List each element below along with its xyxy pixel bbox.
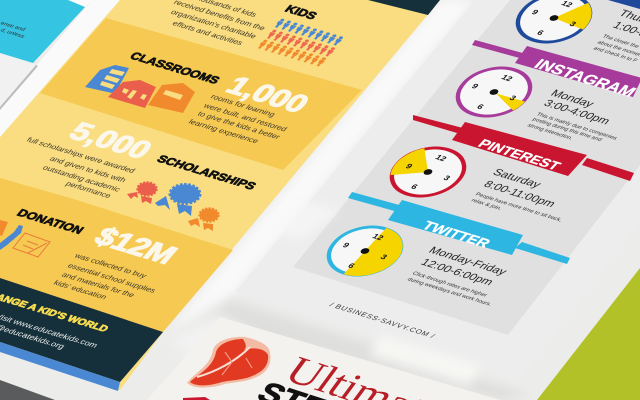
text: thursday: The closer the bbox=[601, 34, 640, 49]
banner: twitter: TWITTER bbox=[418, 219, 493, 251]
text: pinterest bbox=[470, 168, 564, 223]
clock: pinterest: 12 bbox=[433, 153, 449, 163]
text: twitter: Click-through rates are higher bbox=[411, 271, 488, 298]
clock: twitter: 6 bbox=[346, 261, 357, 270]
panel: bottom left dark surface bbox=[0, 380, 55, 400]
banner: pinterest: PINTEREST bbox=[474, 137, 563, 173]
banner: instagram bbox=[472, 40, 640, 100]
clock: pinterest: 3 bbox=[441, 173, 453, 182]
text: instagram: 3:00-4:00pm bbox=[541, 99, 612, 127]
banner: instagram: INSTAGRAM bbox=[530, 56, 640, 100]
text: rooms bbox=[187, 93, 289, 145]
stat: 5,000: 5,000 bbox=[63, 118, 158, 165]
panel: yellow kids poster bbox=[0, 0, 440, 391]
text: twitter bbox=[406, 246, 509, 307]
footer band bbox=[0, 278, 163, 382]
text: kids benefits: efforts and activities bbox=[170, 19, 245, 47]
text: kids benefits bbox=[169, 0, 268, 47]
text: scholarships bbox=[25, 136, 137, 200]
text: rooms: learning experience bbox=[187, 118, 261, 145]
text: donation details: and materials for the bbox=[60, 271, 137, 299]
stat: 1,000: 1,000 bbox=[220, 72, 315, 119]
banner stripe: thursday blue bbox=[608, 0, 640, 9]
stat: $12M: $12M bbox=[88, 223, 183, 270]
band: donation bbox=[0, 178, 233, 332]
clock: instagram: 6 bbox=[475, 102, 486, 111]
white gap highlight beside yellow poster bbox=[170, 0, 475, 330]
panel: green poster corner bbox=[537, 268, 640, 400]
left white strip highlight bbox=[0, 0, 122, 140]
text: instagram: posting during this time and bbox=[531, 117, 603, 143]
text: thursday bbox=[592, 9, 640, 64]
text: instagram: This is mainly due to companies bbox=[535, 112, 618, 141]
text: donation details: kids' education bbox=[52, 279, 109, 301]
text: instagram bbox=[526, 89, 618, 143]
icon: school supplies bbox=[0, 220, 50, 257]
clock: pinterest bbox=[376, 140, 478, 203]
text: thursday: and check in to F bbox=[592, 46, 639, 64]
heading: donation: DONATION bbox=[14, 207, 87, 236]
text: pinterest: People have more time to sit back, bbox=[474, 192, 564, 223]
clock: thursday: 6 bbox=[535, 28, 546, 37]
text: instagram: strong interaction. bbox=[526, 123, 574, 141]
banner: twitter bbox=[348, 192, 570, 264]
icon: steak bbox=[187, 337, 271, 388]
text: website: / BUSINESS-SAVVY.COM / bbox=[328, 301, 438, 340]
text: scholarships: performance bbox=[64, 180, 114, 200]
icon: award ribbons bbox=[127, 182, 218, 231]
text: rooms: rooms for learning bbox=[209, 93, 277, 118]
panel: cyan poster corner bbox=[0, 0, 92, 110]
clock: pinterest: 9 bbox=[404, 162, 415, 170]
icon: people rows bbox=[257, 18, 344, 67]
text: twitter: 12:00-6:00pm bbox=[418, 258, 495, 288]
clock: instagram: 12 bbox=[499, 73, 515, 83]
text: scholarships: outstanding academic bbox=[41, 164, 122, 193]
text: pinterest: relax & join. bbox=[470, 198, 503, 212]
text: rooms: were built, and restored bbox=[201, 102, 289, 133]
clock: thursday: 9 bbox=[530, 8, 541, 16]
clock: instagram: 3 bbox=[507, 93, 519, 102]
clock: thursday: 3 bbox=[567, 19, 579, 28]
clock: twitter: 12 bbox=[370, 232, 386, 242]
top dark band bbox=[368, 0, 440, 15]
clock: thursday bbox=[504, 0, 606, 50]
clock: pinterest: 6 bbox=[409, 182, 420, 191]
heading: scholarships: SCHOLARSHIPS bbox=[154, 153, 259, 192]
text: rooms: to give the kids a better bbox=[196, 110, 282, 141]
clock: instagram: 9 bbox=[470, 82, 481, 90]
clock: instagram bbox=[444, 61, 546, 124]
text: donation details: essential school supplies bbox=[66, 262, 158, 294]
banner: pinterest bbox=[413, 115, 634, 181]
text: pinterest: Saturday bbox=[490, 168, 543, 190]
text: pinterest: 8:00-11:00pm bbox=[481, 180, 557, 209]
soft shadow and glass highlights bbox=[170, 200, 530, 400]
text: scholarships: full scholarships were awarded bbox=[25, 136, 137, 175]
text: kids benefits: organization's charitable bbox=[169, 8, 259, 40]
heading: classrooms: CLASSROOMS bbox=[127, 50, 223, 86]
text: donation details bbox=[52, 252, 158, 301]
clock: twitter: 3 bbox=[378, 252, 390, 261]
text: twitter: during weekdays and work hours. bbox=[406, 277, 493, 307]
text: scholarships: and given to kids with bbox=[48, 155, 128, 184]
text: instagram: Monday bbox=[548, 89, 596, 110]
panel: steak poster bbox=[147, 317, 500, 400]
clock: twitter: 9 bbox=[341, 241, 352, 249]
band: classrooms bbox=[40, 18, 362, 170]
clock: twitter bbox=[314, 219, 417, 284]
red fragment at poster bottom bbox=[183, 397, 210, 400]
panel: social media timing poster bbox=[235, 0, 640, 382]
heading: kids: KIDS bbox=[282, 3, 320, 22]
footer blue strip bbox=[0, 342, 120, 391]
text: twitter: Monday-Friday bbox=[426, 246, 509, 278]
icon: school buildings bbox=[85, 65, 195, 113]
text: donation details: was collected to buy bbox=[72, 252, 149, 280]
